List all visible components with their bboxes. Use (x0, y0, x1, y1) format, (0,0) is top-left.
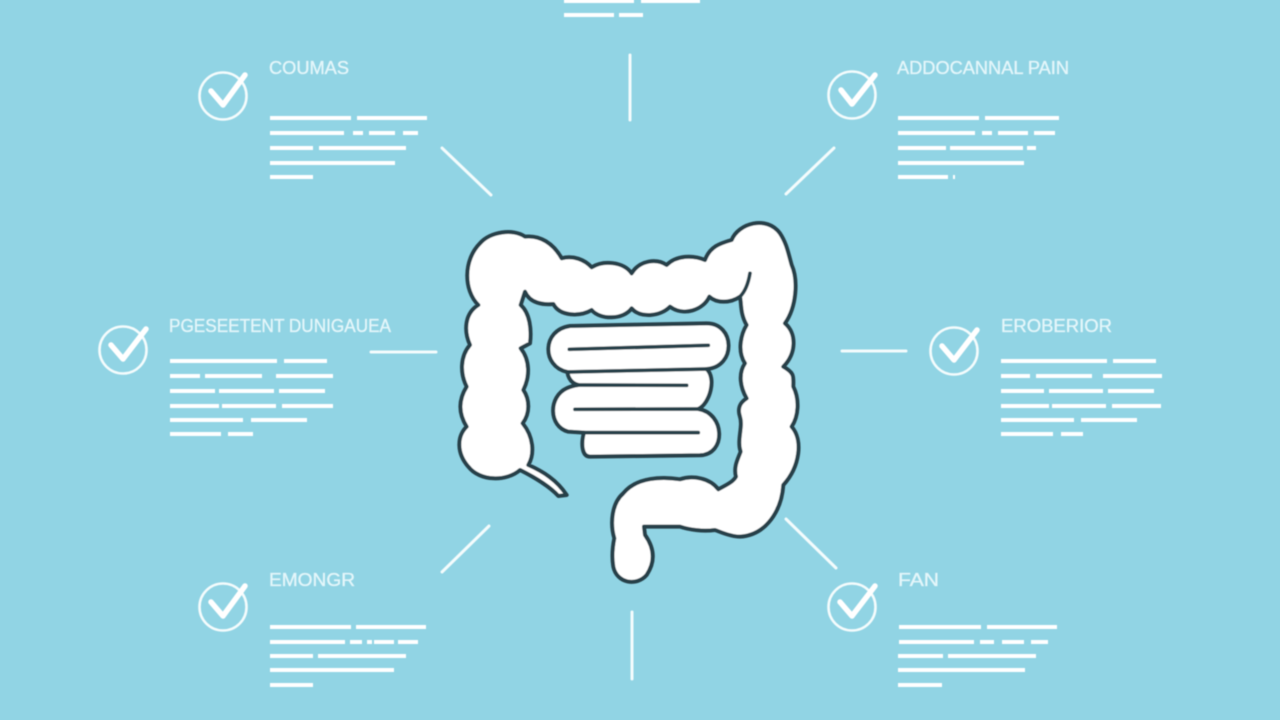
icon: check circle (930, 328, 978, 374)
text block: bottom-left (270, 627, 426, 685)
text block: middle-right (1001, 361, 1162, 434)
heading: bottom-right: FAN (898, 570, 939, 590)
icon: check circle (828, 584, 876, 630)
panel: top-right symptom (828, 58, 1069, 177)
icon: check circle (200, 584, 246, 630)
heading: bottom-left: EMONGR (269, 570, 355, 590)
panel: bottom-left symptom (200, 570, 426, 685)
heading: top-right: ADDOCANNAL PAIN (897, 58, 1069, 78)
icon: check circle (828, 72, 876, 118)
icon: intestines (459, 223, 799, 582)
text block: top-left (270, 118, 427, 177)
panel: top-left symptom (200, 58, 427, 177)
icon: check circle (100, 326, 146, 374)
small intestine (548, 323, 729, 457)
panel: bottom-right symptom (828, 570, 1057, 685)
panel: middle-right symptom (930, 316, 1162, 434)
panel: middle-left symptom (100, 316, 391, 434)
colon fold (740, 273, 750, 297)
heading: middle-left: PGESEETENT DUNIGAUEA (169, 316, 391, 336)
heading: middle-right: EROBERIOR (1001, 316, 1112, 336)
large intestine (459, 223, 799, 582)
panel: top (cropped) (564, 1, 700, 15)
connector lines (371, 55, 906, 679)
text block: middle-left (170, 361, 333, 434)
heading: top-left: COUMAS (269, 58, 349, 78)
small intestine folds (567, 345, 708, 433)
text block: bottom-right (898, 627, 1057, 685)
icon: check circle (200, 72, 246, 120)
text block: top-right (898, 118, 1059, 177)
